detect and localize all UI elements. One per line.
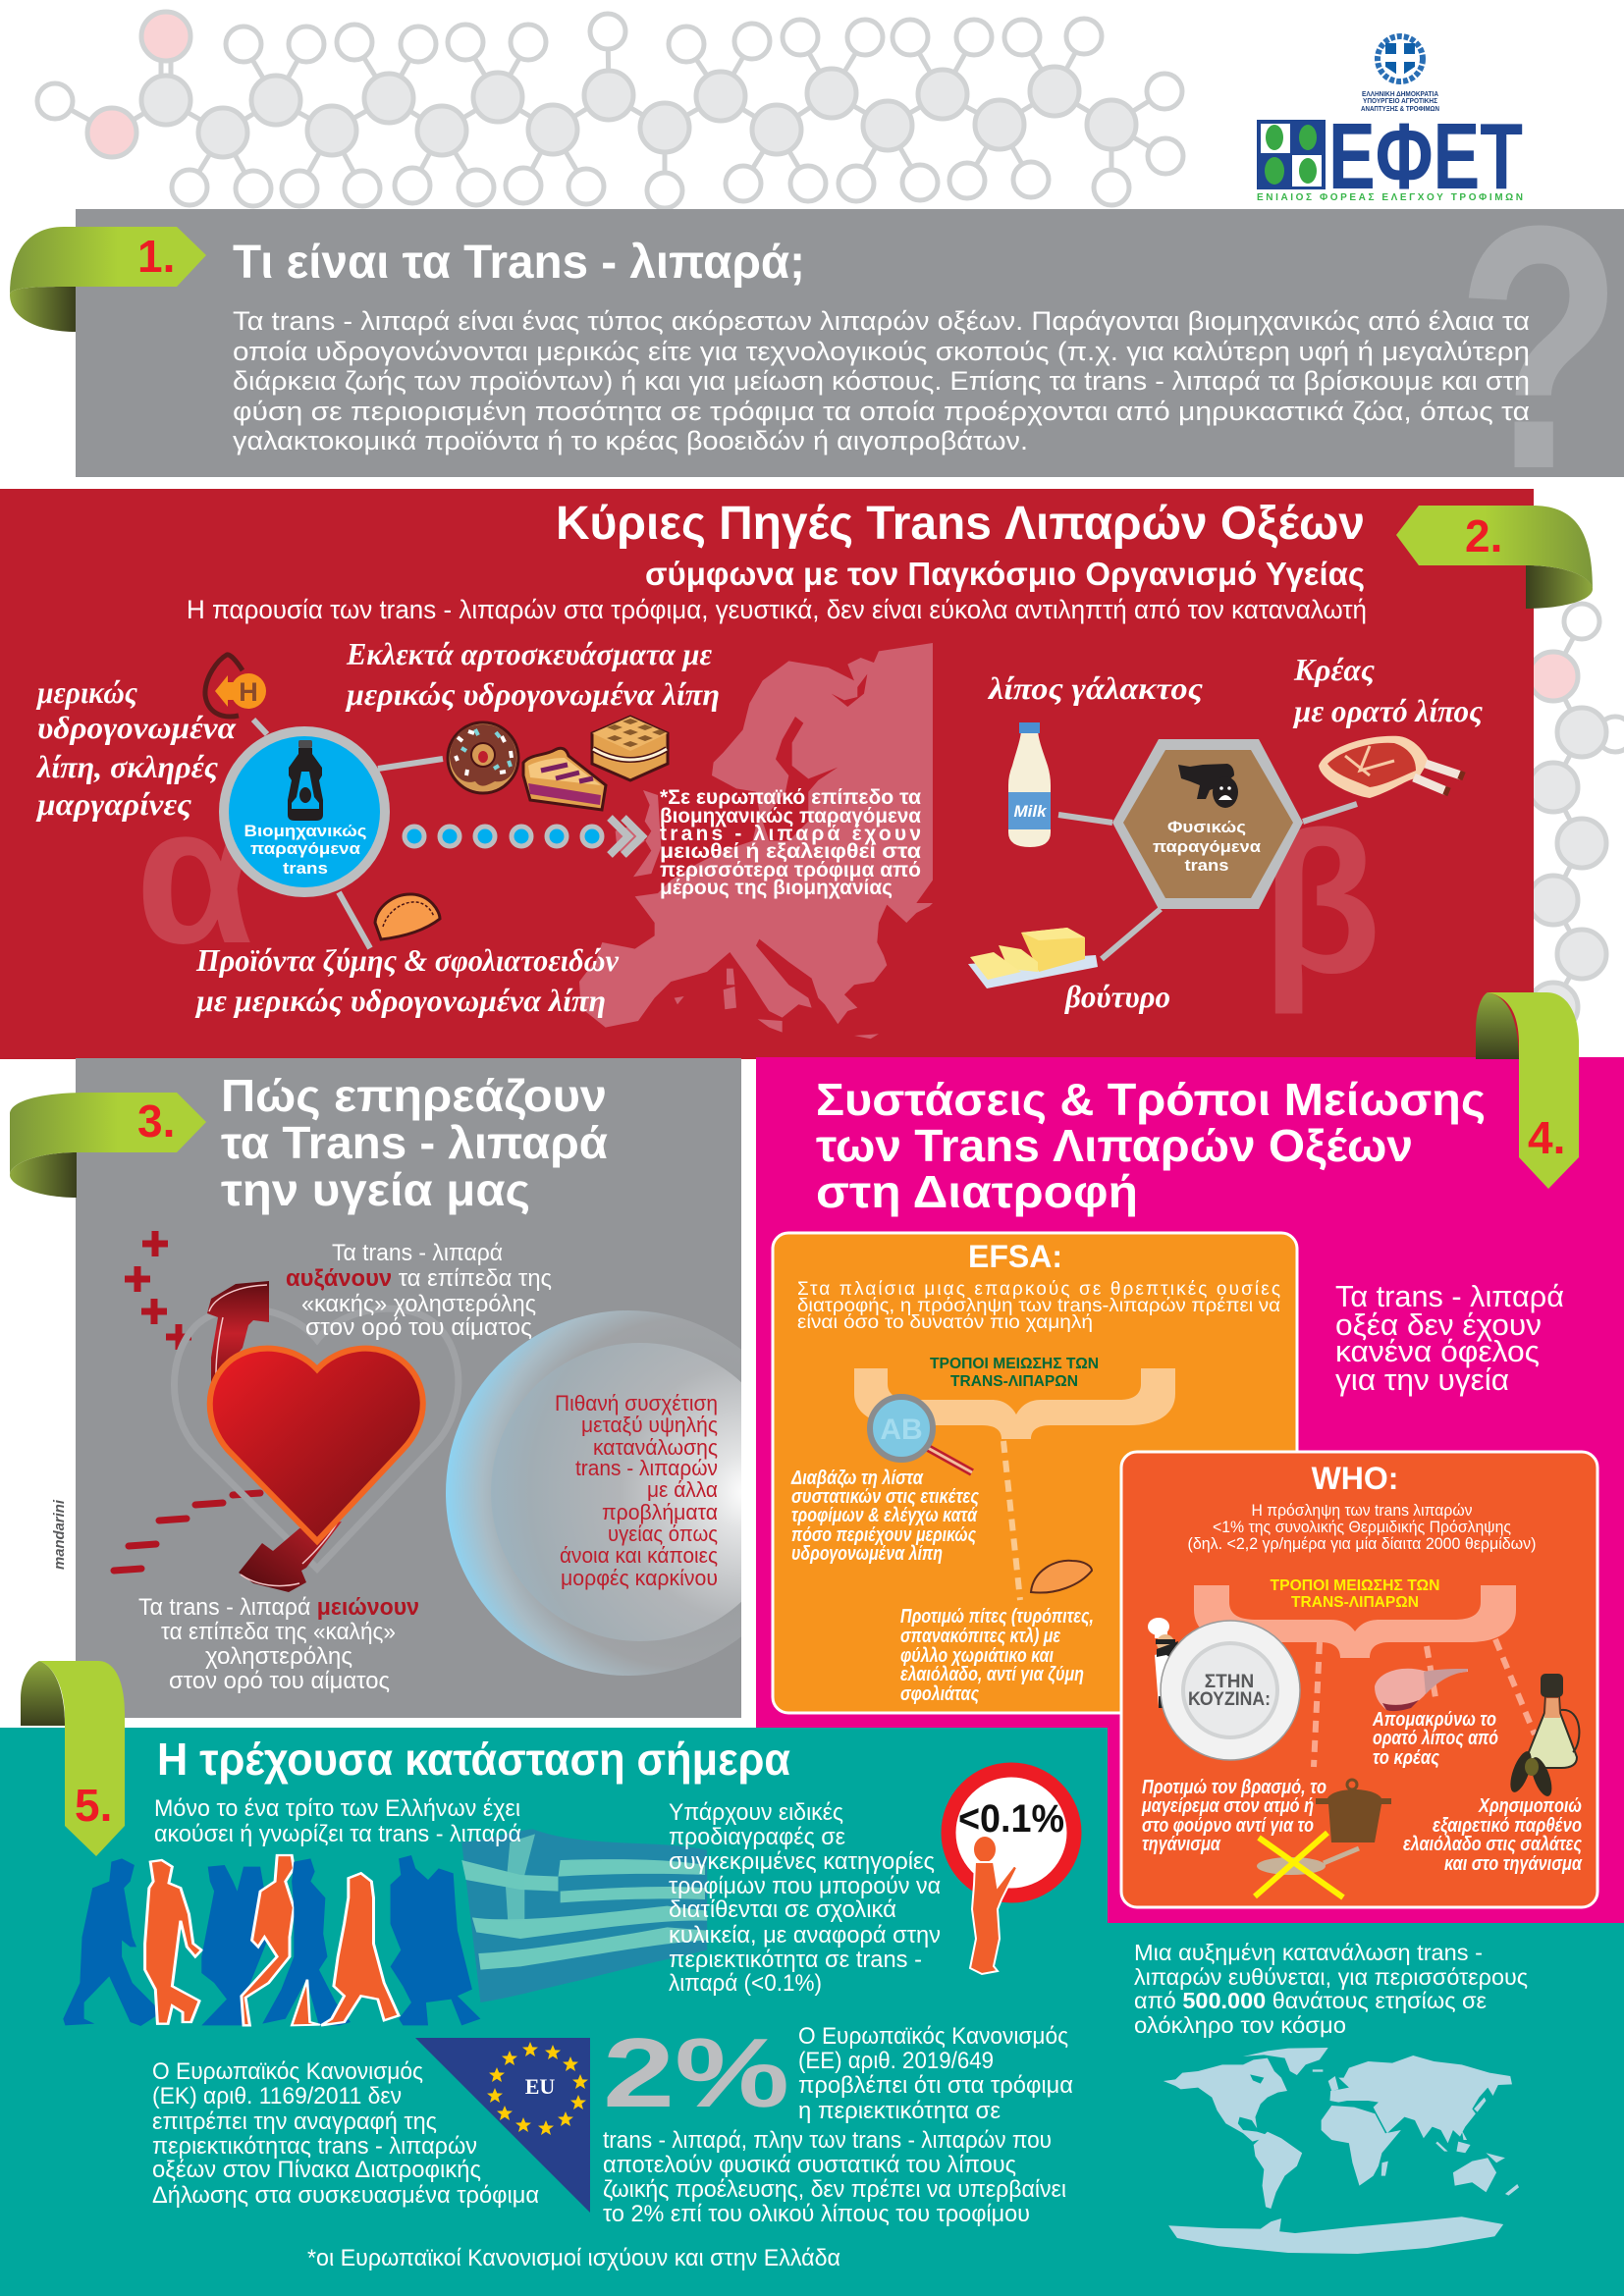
tip: read the label: συστατικών στις ετικέτες bbox=[791, 1486, 979, 1508]
text: school canteens: Υπάρχουν ειδικές bbox=[669, 1799, 843, 1826]
text: regulation 2019/649: Ο Ευρωπαϊκός Κανονισμός bbox=[798, 2023, 1068, 2050]
hand lettered label: margarines: μαργαρίνες bbox=[35, 786, 191, 822]
tip: read the label: τροφίμων & ελέγχω κατά bbox=[791, 1505, 978, 1526]
icon: pie bbox=[523, 748, 606, 810]
text: raises bad cholesterol: στον ορό του αίματος bbox=[305, 1314, 532, 1341]
WHO heading: WHO: bbox=[1312, 1461, 1398, 1496]
text: school canteens: προδιαγραφές σε bbox=[669, 1824, 845, 1850]
EU triangle: EU bbox=[525, 2074, 555, 2099]
EU triangle bbox=[415, 2038, 590, 2213]
icon: lamb chop bbox=[1375, 1669, 1468, 1711]
ribbon 4 bbox=[1476, 992, 1579, 1189]
heart outline bbox=[175, 1308, 459, 1569]
tip: boil or steam: τηγάνισμα bbox=[1142, 1834, 1221, 1855]
text: regulation 2019/649 bbox=[603, 2023, 1073, 2227]
body text: διάρκεια ζωής των προϊόντων) ή και για μείωση κόστους. Επίσης τα trans - λιπαρά τα βρίσκουμε και στη bbox=[233, 366, 1530, 396]
background molecule pattern bbox=[37, 12, 1624, 1032]
credit: mandarini bbox=[51, 1499, 68, 1570]
text: deaths worldwide: ολόκληρο τον κόσμο bbox=[1134, 2012, 1346, 2038]
tip: olive oil: εξαιρετικό παρθένο bbox=[1433, 1815, 1582, 1837]
text: regulation 2019/649: (ΕΕ) αριθ. 2019/649 bbox=[798, 2048, 994, 2074]
tip: olive oil: ελαιόλαδο στις σαλάτες bbox=[1403, 1834, 1582, 1855]
hand lettered label: margarines: υδρογονωμένα bbox=[37, 710, 237, 745]
text: other health problems: Πιθανή συσχέτιση bbox=[555, 1391, 718, 1415]
heading bbox=[816, 1074, 1486, 1217]
tip: olive oil bbox=[1403, 1795, 1583, 1875]
text: other health problems bbox=[555, 1391, 718, 1590]
wordmark: ΕΦΕΤ bbox=[1328, 104, 1523, 209]
plate: ΚΟΥΖΙΝΑ: bbox=[1188, 1689, 1271, 1710]
text: school canteens: συγκεκριμένες κατηγορίες bbox=[669, 1848, 935, 1875]
hand lettered label: meat: Κρέας bbox=[1293, 652, 1375, 687]
people silhouettes bbox=[63, 1855, 480, 2026]
panel: recommendations bbox=[756, 992, 1624, 1923]
tip: boil or steam: στο φούρνο αντί για το bbox=[1142, 1815, 1314, 1837]
person bbox=[262, 1858, 351, 2025]
icon: olive oil bbox=[1506, 1674, 1579, 1798]
tip: remove visible fat bbox=[1372, 1709, 1498, 1769]
text: school canteens bbox=[669, 1799, 941, 1997]
text: raises bad cholesterol: Τα trans - λιπαρά bbox=[332, 1240, 503, 1266]
heading: Τι είναι τα Trans - λιπαρά; bbox=[233, 237, 805, 289]
text: regulation 2019/649: ζωικής προέλευσης, δεν πρέπει να υπερβαίνει bbox=[603, 2176, 1066, 2203]
callout: no benefit: για την υγεία bbox=[1335, 1362, 1509, 1397]
circle label: trans bbox=[283, 859, 328, 878]
hand lettered label: milk fat: λίπος γάλακτος bbox=[987, 670, 1203, 706]
icon: crossed out pan bbox=[1255, 1833, 1359, 1897]
pair of people bbox=[201, 1865, 269, 2025]
ministry name: ΕΛΛΗΝΙΚΗ ΔΗΜΟΚΡΑΤΙΑ bbox=[1362, 89, 1439, 98]
icon: pie pastry bbox=[1031, 1561, 1092, 1593]
tip: boil or steam: μαγείρεμα στον ατμό ή bbox=[1141, 1795, 1314, 1817]
text: other health problems: μορφές καρκίνου bbox=[561, 1566, 718, 1590]
note about Europe: βιομηχανικώς παραγόμενα bbox=[660, 805, 921, 828]
Greek flag bbox=[461, 1829, 707, 2002]
plate bbox=[1161, 1621, 1300, 1760]
subheading: σύμφωνα με τον Παγκόσμιο Οργανισμό Υγείας bbox=[645, 556, 1365, 592]
ribbon 3 bbox=[10, 1093, 206, 1198]
text: regulation 1169/2011: επιτρέπει την αναγραφή της bbox=[152, 2109, 437, 2135]
brace title: ΤΡΟΠΟΙ ΜΕΙΩΣΗΣ ΤΩΝ bbox=[1271, 1577, 1439, 1594]
icon: pastry bbox=[375, 894, 440, 939]
heading: την υγεία μας bbox=[221, 1164, 530, 1215]
brace bbox=[854, 1368, 1175, 1439]
hand lettered label: meat: με ορατό λίπος bbox=[1292, 693, 1483, 728]
tip: prefer filo pies: ελαιόλαδο, αντί για ζύμη bbox=[900, 1664, 1084, 1685]
hexagon label: Φυσικώς bbox=[1167, 818, 1246, 836]
text: other health problems: κατανάλωσης bbox=[593, 1435, 718, 1460]
arrow down bbox=[239, 1522, 342, 1592]
footnote: *οι Ευρωπαϊκοί Κανονισμοί ισχύουν και στην Ελλάδα bbox=[307, 2245, 840, 2271]
WHO intro: (δηλ. <2,2 γρ/ημέρα για μία δίαιτα 2000 θερμίδων) bbox=[1188, 1534, 1536, 1553]
heading: στη Διατροφή bbox=[816, 1166, 1138, 1217]
person highlighted bbox=[242, 1855, 294, 2025]
text: school canteens: τροφίμων που μπορούν να bbox=[669, 1873, 941, 1899]
text: school canteens: διατίθενται σε σχολικά bbox=[669, 1896, 896, 1923]
text: lowers good cholesterol bbox=[138, 1594, 419, 1694]
tip: remove visible fat: το κρέας bbox=[1373, 1747, 1439, 1769]
plate: ΣΤΗΝ bbox=[1205, 1672, 1254, 1692]
WHO intro bbox=[1188, 1501, 1536, 1553]
panel: EFSA bbox=[773, 1233, 1297, 1713]
tip: remove visible fat: ορατό λίπος από bbox=[1373, 1728, 1498, 1749]
text: regulation 2019/649: αποτελούν φυσικά συστατικά του λίπους bbox=[603, 2152, 1016, 2178]
logo: EFET bbox=[1257, 36, 1523, 209]
limit sign bbox=[948, 1770, 1074, 1974]
icon: butter bbox=[968, 928, 1098, 988]
text: other health problems: με άλλα bbox=[647, 1477, 718, 1502]
heading: Πώς επηρεάζουν bbox=[221, 1070, 607, 1121]
text: other health problems: υγείας όπως bbox=[608, 1522, 718, 1546]
icon: pot bbox=[1316, 1780, 1391, 1842]
text: school canteens: λιπαρά (<0.1%) bbox=[669, 1970, 822, 1997]
text: regulation 2019/649: η περιεκτικότητα σε bbox=[798, 2098, 1001, 2124]
glowing orb bbox=[446, 1310, 741, 1676]
text: school canteens: περιεκτικότητα σε trans - bbox=[669, 1947, 922, 1973]
hexagon label: trans bbox=[1184, 856, 1229, 875]
WHO intro: <1% της συνολικής Θερμιδικής Πρόσληψης bbox=[1213, 1518, 1511, 1536]
dotted arrow bbox=[405, 818, 642, 855]
tip: olive oil: και στο τηγάνισμα bbox=[1444, 1853, 1583, 1875]
icon: oil bottle bbox=[288, 740, 323, 821]
body text: Τα trans - λιπαρά είναι ένας τύπος ακόρεστων λιπαρών οξέων. Παράγονται βιομηχανικώς από έλαια τα bbox=[233, 306, 1530, 336]
body text: οποία υδρογονώνονται μερικώς είτε για τεχνολογικούς σκοπούς (π.χ. για καλύτερη υφή ή μεγαλύτερη bbox=[233, 337, 1530, 366]
natural trans hexagon bbox=[1112, 739, 1303, 909]
icon: cow and fat drop bbox=[1178, 764, 1238, 808]
callout: no benefit bbox=[1335, 1279, 1564, 1397]
callout: no benefit: οξέα δεν έχουν bbox=[1335, 1308, 1542, 1342]
person highlighted bbox=[145, 1860, 201, 2024]
text: deaths worldwide bbox=[1134, 1940, 1528, 2038]
note about Europe bbox=[660, 786, 921, 899]
intro line: Η παρουσία των trans - λιπαρών στα τρόφιμα, γευστικά, δεν είναι εύκολα αντιληπτή από τον καταναλωτή bbox=[187, 595, 1367, 624]
EFSA heading: EFSA: bbox=[968, 1239, 1062, 1274]
text: deaths worldwide: Μια αυξημένη κατανάλωση trans - bbox=[1134, 1940, 1483, 1965]
ribbon 1 bbox=[10, 227, 206, 332]
ribbon 2 bbox=[1396, 506, 1593, 609]
brace bbox=[1194, 1585, 1516, 1658]
hand lettered label: dough products bbox=[194, 942, 620, 1018]
hand lettered label: margarines: μερικώς bbox=[35, 674, 137, 710]
person bbox=[63, 1858, 162, 2026]
hand lettered label: dough products: με μερικώς υδρογονωμένα λίπη bbox=[194, 983, 606, 1018]
big number 2%: 2% bbox=[603, 2018, 789, 2128]
hexagon label bbox=[1153, 818, 1262, 875]
heading: Κύριες Πηγές Trans Λιπαρών Οξέων bbox=[556, 498, 1365, 550]
text: deaths worldwide: λιπαρών ευθύνεται, για περισσότερους bbox=[1134, 1964, 1528, 1990]
heading: Συστάσεις & Τρόποι Μείωσης bbox=[816, 1074, 1486, 1125]
icon: milk bottle bbox=[1008, 722, 1051, 847]
text: regulation 1169/2011 bbox=[152, 2058, 539, 2209]
hand lettered label: dough products: Προϊόντα ζύμης & σφολιατοειδών bbox=[195, 942, 620, 978]
EFSA intro: διατροφής, η πρόσληψη των trans-λιπαρών πρέπει να bbox=[797, 1296, 1280, 1316]
panel: WHO bbox=[1121, 1452, 1597, 1907]
circle label: παραγόμενα bbox=[250, 839, 361, 858]
note about Europe: περισσότερα τρόφιμα από bbox=[660, 859, 921, 881]
heading bbox=[221, 1070, 608, 1215]
ministry name bbox=[1361, 89, 1439, 113]
circle label bbox=[244, 822, 367, 878]
text: raises bad cholesterol bbox=[286, 1240, 552, 1341]
note about Europe: trans - λιπαρά έχουν bbox=[660, 823, 921, 845]
text: regulation 2019/649: trans - λιπαρά, πλην των trans - λιπαρών που bbox=[603, 2127, 1052, 2154]
text: lowers good cholesterol: στον ορό του αίματος bbox=[169, 1668, 390, 1694]
text: other health problems: προβλήματα bbox=[602, 1500, 718, 1524]
plus signs bbox=[125, 1231, 191, 1350]
text: regulation 2019/649: το 2% επί του ολικού λίπους του τροφίμου bbox=[603, 2201, 1030, 2227]
woman highlighted bbox=[321, 1873, 399, 2025]
heading: τα Trans - λιπαρά bbox=[221, 1117, 608, 1168]
tip: prefer filo pies: φύλλο χωριάτικο και bbox=[900, 1645, 1054, 1667]
icon: donut bbox=[448, 722, 518, 793]
hexagon label: παραγόμενα bbox=[1153, 837, 1262, 856]
ribbon 1: 1. bbox=[137, 231, 175, 282]
icon: hydrogen atom bbox=[205, 655, 266, 717]
hand lettered label: pastries: Εκλεκτά αρτοσκευάσματα με bbox=[346, 636, 712, 671]
tip: prefer filo pies: Προτιμώ πίτες (τυρόπιτες, bbox=[900, 1606, 1094, 1628]
text: raises bad cholesterol: «κακής» χοληστερόλης bbox=[301, 1291, 536, 1317]
tip: read the label bbox=[790, 1468, 979, 1565]
panel: effect on health bbox=[10, 1058, 811, 1718]
heart bbox=[210, 1349, 423, 1541]
EFSA intro: Στα πλαίσια μιας επαρκούς σε θρεπτικές ουσίες bbox=[797, 1279, 1280, 1300]
hand lettered label: pastries: μερικώς υδρογονωμένα λίπη bbox=[345, 676, 720, 712]
brace title bbox=[1271, 1577, 1439, 1611]
tip: prefer filo pies bbox=[900, 1606, 1094, 1705]
world map bbox=[1164, 2048, 1519, 2254]
brace title: ΤΡΟΠΟΙ ΜΕΙΩΣΗΣ ΤΩΝ bbox=[930, 1356, 1099, 1372]
body text: φύση σε περιορισμένη ποσότητα σε τρόφιμα τα οποία προέρχονται από μηρυκαστικά ζώα, όπως τα bbox=[233, 397, 1530, 426]
hand lettered label: meat bbox=[1292, 652, 1483, 728]
icon: layered cake bbox=[592, 717, 668, 780]
text: one third: Μόνο το ένα τρίτο των Ελλήνων έχει bbox=[154, 1795, 520, 1822]
icon: EFET squares bbox=[1257, 120, 1326, 189]
note about Europe: *Σε ευρωπαϊκό επίπεδο τα bbox=[660, 786, 921, 809]
tip: prefer filo pies: σπανακόπιτες κτλ) με bbox=[900, 1626, 1060, 1647]
callout: no benefit: κανένα όφελος bbox=[1335, 1334, 1540, 1368]
tip: olive oil: Χρησιμοποιώ bbox=[1478, 1795, 1582, 1817]
ministry name: ΑΝΑΠΤΥΞΗΣ & ΤΡΟΦΙΜΩΝ bbox=[1361, 104, 1439, 113]
tip: prefer filo pies: σφολιάτας bbox=[900, 1683, 979, 1705]
heading: των Trans Λιπαρών Οξέων bbox=[816, 1120, 1413, 1171]
letter alpha: α bbox=[135, 766, 255, 985]
brace title: TRANS-ΛΙΠΑΡΩΝ bbox=[1291, 1594, 1419, 1611]
ribbon 4: 4. bbox=[1528, 1112, 1565, 1163]
arrow up bbox=[207, 1281, 269, 1386]
dashed connectors bbox=[1314, 1639, 1535, 1767]
text: regulation 1169/2011: (ΕΚ) αριθ. 1169/2011 δεν bbox=[152, 2083, 402, 2109]
minus signs bbox=[114, 1493, 260, 1571]
ribbon 5 bbox=[21, 1661, 125, 1856]
icon: hydrogen atom: Η bbox=[239, 677, 258, 707]
text: raises bad cholesterol: αυξάνουν τα επίπεδα της bbox=[286, 1265, 552, 1292]
industrial trans circle bbox=[219, 726, 390, 897]
couple bbox=[391, 1855, 480, 2025]
text: one third: ακούσει ή γνωρίζει τα trans - λιπαρά bbox=[154, 1821, 521, 1847]
note about Europe: μειωθεί ή εξαλειφθεί στα bbox=[660, 840, 921, 863]
text: regulation 1169/2011: οξέων στον Πίνακα Διατροφικής bbox=[152, 2157, 481, 2183]
panel: what are trans fats bbox=[10, 153, 1624, 541]
text: regulation 1169/2011: Ο Ευρωπαϊκός Κανονισμός bbox=[152, 2058, 423, 2085]
text: other health problems: trans - λιπαρών bbox=[575, 1456, 718, 1480]
brace title: TRANS-ΛΙΠΑΡΩΝ bbox=[950, 1373, 1078, 1390]
EFSA intro: είναι όσο το δυνατόν πιο χαμηλή bbox=[797, 1312, 1093, 1333]
text: deaths worldwide: από 500.000 θανάτους ετησίως σε bbox=[1134, 1988, 1487, 2013]
note about Europe: μέρους της βιομηχανίας bbox=[660, 877, 893, 899]
tip: read the label: Διαβάζω τη λίστα bbox=[790, 1468, 924, 1489]
EFSA intro bbox=[797, 1279, 1280, 1333]
text: regulation 2019/649: προβλέπει ότι στα τρόφιμα bbox=[798, 2072, 1073, 2099]
heading: Η τρέχουσα κατάσταση σήμερα bbox=[157, 1734, 790, 1785]
panel: current situation bbox=[0, 1661, 1624, 2296]
text: regulation 1169/2011: περιεκτικότητας trans - λιπαρών bbox=[152, 2133, 477, 2160]
body text bbox=[233, 306, 1530, 455]
text: other health problems: άνοια και κάποιες bbox=[560, 1543, 718, 1568]
icon: magnifier bbox=[870, 1397, 972, 1472]
icon: raw meat bbox=[1319, 736, 1464, 798]
WHO intro: Η πρόσληψη των trans λιπαρών bbox=[1251, 1501, 1473, 1520]
icon: child reading bbox=[970, 1836, 1017, 1974]
callout: no benefit: Τα trans - λιπαρά bbox=[1335, 1279, 1564, 1313]
tip: boil or steam bbox=[1141, 1777, 1326, 1855]
icon: magnifier: ΑΒ bbox=[880, 1414, 923, 1446]
body text: γαλακτοκομικά προϊόντα ή το κρέας βοοειδών ή αιγοπροβάτων. bbox=[233, 426, 1028, 455]
tip: remove visible fat: Απομακρύνω το bbox=[1372, 1709, 1496, 1731]
text: school canteens: κυλικεία, με αναφορά στην bbox=[669, 1922, 941, 1949]
hand lettered label: butter: βούτυρο bbox=[1064, 979, 1170, 1014]
hand lettered label: pastries bbox=[345, 636, 720, 712]
text: other health problems: μεταξύ υψηλής bbox=[581, 1413, 718, 1437]
text: lowers good cholesterol: χοληστερόλης bbox=[205, 1643, 352, 1670]
text: regulation 1169/2011: Δήλωσης στα συσκευασμένα τρόφιμα bbox=[152, 2182, 539, 2209]
icon: milk bottle: Milk bbox=[1013, 802, 1048, 821]
tip: boil or steam: Προτιμώ τον βρασμό, το bbox=[1142, 1777, 1326, 1798]
ministry name: ΥΠΟΥΡΓΕΙΟ ΑΓΡΟΤΙΚΗΣ bbox=[1363, 96, 1437, 105]
circle label: Βιομηχανικώς bbox=[244, 822, 367, 840]
limit sign: <0.1% bbox=[958, 1797, 1064, 1841]
panel: main sources of trans fats bbox=[0, 489, 1593, 1059]
tip: read the label: υδρογονωμένα λίπη bbox=[791, 1543, 943, 1565]
text: lowers good cholesterol: Τα trans - λιπαρά μειώνουν bbox=[138, 1594, 419, 1621]
text: one third bbox=[154, 1795, 521, 1847]
ribbon 3: 3. bbox=[137, 1095, 175, 1147]
hand lettered label: margarines bbox=[35, 674, 237, 822]
hand lettered label: margarines: λίπη, σκληρές bbox=[35, 749, 218, 784]
tip: read the label: πόσο περιέχουν μερικώς bbox=[791, 1524, 976, 1546]
icon: chef bbox=[1148, 1618, 1204, 1708]
brace title bbox=[930, 1356, 1099, 1390]
person leg highlighted bbox=[292, 1980, 320, 2025]
connector lines bbox=[253, 720, 1357, 959]
ribbon 2: 2. bbox=[1465, 510, 1502, 561]
dashed connector bbox=[1003, 1441, 1020, 1600]
map of Europe bbox=[579, 643, 933, 1039]
letter beta: β bbox=[1262, 790, 1381, 1015]
ribbon 5: 5. bbox=[75, 1780, 112, 1831]
text: lowers good cholesterol: τα επίπεδα της «καλής» bbox=[161, 1619, 396, 1645]
icon: Greek state emblem bbox=[1378, 36, 1423, 81]
tagline: ΕΝΙΑΙΟΣ ΦΟΡΕΑΣ ΕΛΕΓΧΟΥ ΤΡΟΦΙΜΩΝ bbox=[1257, 192, 1523, 203]
